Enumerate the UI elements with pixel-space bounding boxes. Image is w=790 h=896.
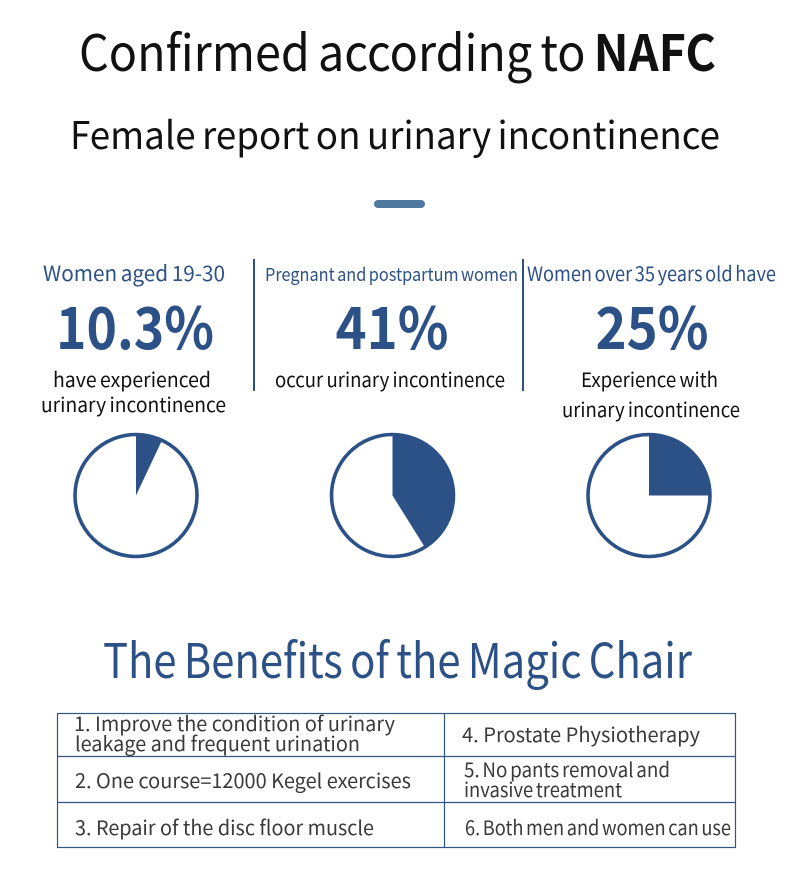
column 3 description: Experience with xyxy=(581,364,718,393)
column 2 heading: Pregnant and postpartum women xyxy=(265,261,518,287)
column 1: women aged 19-30 xyxy=(41,258,226,556)
column 3 description: urinary incontinence xyxy=(562,394,740,423)
benefit 1 xyxy=(74,708,396,757)
pie chart: 10.3% xyxy=(75,434,197,556)
pie chart: 25% xyxy=(588,434,710,556)
divider xyxy=(253,259,255,391)
benefits table xyxy=(58,708,736,848)
benefit 2: 2. One course=12000 Kegel exercises xyxy=(75,765,411,794)
benefits heading: The Benefits of the Magic Chair xyxy=(103,622,692,692)
benefit 6: 6. Both men and women can use xyxy=(465,812,731,841)
column 1 description xyxy=(41,364,226,418)
column 1 percentage: 10.3% xyxy=(56,282,214,366)
benefit 1: 1. Improve the condition of urinary xyxy=(74,708,396,737)
benefit 1: leakage and frequent urination xyxy=(75,728,360,757)
column 2 description: occur urinary incontinence xyxy=(275,364,505,393)
benefit 5: 5. No pants removal and xyxy=(464,754,670,783)
column 2 percentage: 41% xyxy=(336,282,448,366)
accent bar xyxy=(374,200,425,208)
pie chart: 41% xyxy=(332,434,454,556)
divider xyxy=(522,259,524,391)
title: Confirmed according to NAFC xyxy=(79,14,716,86)
benefit 5: invasive treatment xyxy=(464,774,622,803)
column 3: women over 35 xyxy=(527,258,776,556)
subtitle: Female report on urinary incontinence xyxy=(70,105,720,160)
benefit 4: 4. Prostate Physiotherapy xyxy=(462,719,701,748)
benefit 5 xyxy=(464,754,670,803)
column 1 description: have experienced xyxy=(53,364,211,393)
column 3 percentage: 25% xyxy=(596,282,708,366)
column 1 heading: Women aged 19-30 xyxy=(43,258,225,288)
benefit 3: 3. Repair of the disc floor muscle xyxy=(75,812,374,841)
column 3 description xyxy=(562,364,740,423)
column 2: pregnant and postpartum women xyxy=(265,261,518,556)
column 1 description: urinary incontinence xyxy=(41,389,226,418)
